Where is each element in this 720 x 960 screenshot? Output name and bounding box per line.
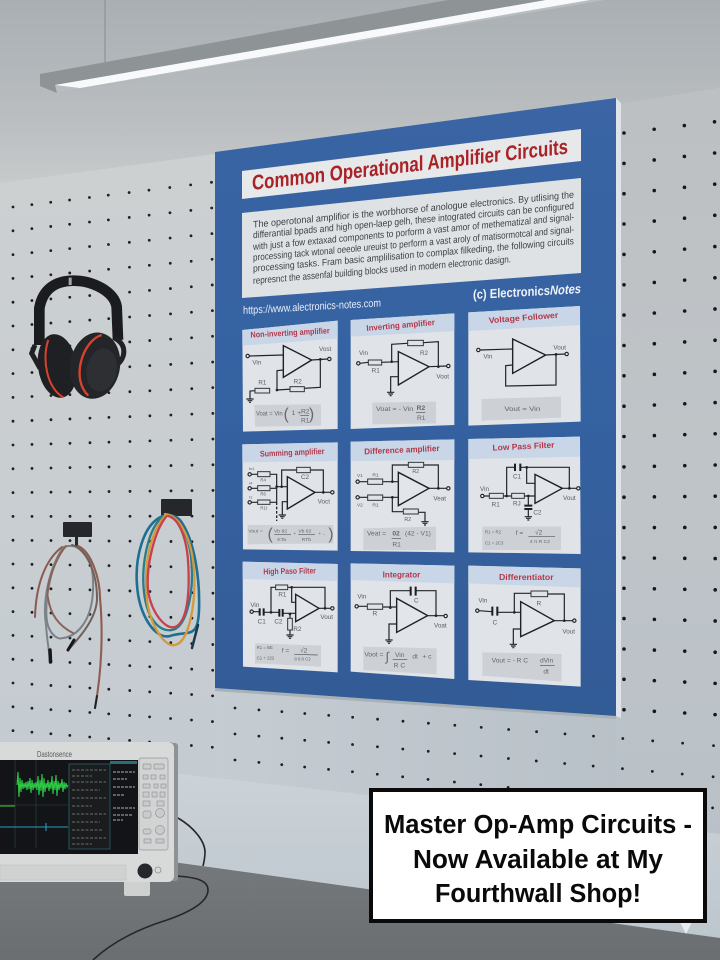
oscilloscope screen [0,760,138,854]
card: non-inverting amplifier: R1 [258,379,267,386]
card: difference amplifier: V2 [357,502,363,507]
card: low pass filter: √2 [535,528,543,536]
card: summing amplifier: C2 [301,474,310,481]
card: summing amplifier: ( [268,526,274,543]
card: low pass filter: Low Pass Filter [492,440,555,453]
card: low pass filter: Vin [480,486,490,493]
card: inverting amplifier: R1 [417,415,426,422]
card: low pass filter: C1 [513,473,522,480]
card: integrator: + c [422,654,432,661]
card: difference amplifier: 02 [392,531,400,538]
card: inverting amplifier: R2 [417,405,425,412]
card: summing amplifier: I4 [249,480,253,485]
intro text block: differantial bpads and high open-laep gelh, these intograted circuits can be configured [253,201,574,241]
title banner: Common Operational Amplifier Circuits [252,136,568,195]
intro text block: represnct the assenfal building blocks used in modern electronic dasign. [253,254,511,287]
hook and grey-brown cable bundle [35,522,102,708]
card: low pass filter: R1 [492,501,500,508]
card: integrator: Vin [395,652,405,659]
hook and coloured cable bundle [137,499,199,648]
card: low pass filter: R1 = R2 [485,530,502,535]
card: differentiator: C [493,619,498,626]
card: low pass filter: 4 π R C2 [530,539,550,545]
card: low pass filter: RJ [513,501,521,508]
card: difference amplifier: R1 [372,473,379,479]
pegboard holes: right block [624,121,720,715]
card: difference amplifier: R2 [412,469,419,475]
card: difference amplifier: R2 [404,517,411,523]
card: integrator: Vin [357,593,367,600]
card: differentiator [468,566,581,687]
card: high pass filter: R2 [293,626,302,633]
pegboard holes: left block [13,182,214,747]
card: non-inverting amplifier: ) [309,406,314,423]
lower wall panel [0,754,720,945]
card: voltage follower [468,306,581,426]
card: difference amplifier: Veat = [367,531,386,538]
oscilloscope [0,742,178,896]
card: integrator: Voot = [364,651,384,658]
card: differentiator: dVin [540,658,553,665]
icon: headphones [32,278,125,403]
callout: shop promotion [371,790,705,921]
card: differentiator: dt [543,669,549,676]
card: inverting amplifier: Inverting amplifier [366,317,436,333]
card: differentiator: Vin [478,597,488,604]
ceiling light fixture [40,0,606,93]
card: summing amplifier: RTb [302,537,311,543]
card: differentiator: R [537,601,542,608]
card: summing amplifier: KTa [277,537,286,543]
card: summing amplifier: Summing amplifier [260,446,325,459]
card: summing amplifier: + [293,531,296,537]
card: high pass filter: C1 [258,619,266,626]
card: non-inverting amplifier: Voat = Vin [256,411,283,418]
card: high pass filter: Vin [250,602,260,609]
intro text block: with just a fow extaxad components to porform a vast amor of methematizal and signal- [252,212,574,253]
intro text block [242,178,581,298]
oscilloscope brand: Dastonsence [37,749,72,759]
card row 2 [242,437,581,554]
card: high pass filter: R1 [278,592,287,599]
card: summing amplifier: Vb 62 [298,528,312,534]
card: non-inverting amplifier [242,321,338,432]
card: non-inverting amplifier: ( [284,406,290,423]
cables behind oscilloscope [93,818,208,960]
small white marker under callout [680,922,692,934]
card: differentiator: Vout [562,628,575,635]
card: summing amplifier: I1 [249,494,253,499]
card: low pass filter: C2 [533,509,542,516]
callout: shop promotion: Master Op-Amp Circuits - [384,811,692,839]
upper wall background [0,0,720,190]
card: summing amplifier: ) [328,526,333,543]
card row 1 [242,306,581,432]
card: high pass filter: f = [282,647,289,654]
card: summing amplifier: R6 [260,492,266,497]
card: inverting amplifier: Voot [436,373,449,380]
card: low pass filter: C1 = 2C3 [485,540,504,545]
pegboard wall [0,88,720,850]
card: low pass filter: Vout [563,495,576,502]
copyright: (c) ElectronicsNotes [473,281,581,302]
card: voltage follower: Vin [483,353,493,360]
card: integrator: Integrator [383,569,421,579]
card: high pass filter: 8 8 8 C2 [294,656,311,661]
website link: https://www.alectronics-notes.com [243,297,381,317]
card: integrator: dt [412,654,418,661]
card: integrator: Voat [434,622,447,629]
card: non-inverting amplifier: Vin [252,359,262,366]
card: difference amplifier: V1 [357,473,363,478]
intro text block: The operotonal amplifior is the worbhorse of anologue electronics. By utlising the [253,190,574,231]
card: voltage follower: Vout = Vin [504,406,541,413]
card: difference amplifier: Veat [433,495,446,502]
desk surface [0,837,720,960]
oscilloscope controls [139,758,168,850]
card: non-inverting amplifier: 1 + [292,410,301,417]
card: integrator [351,563,454,679]
card: integrator: C [414,597,419,604]
card: summing amplifier: Voct [318,498,330,505]
callout: shop promotion: Fourthwall Shop! [435,880,641,908]
card: high pass filter [243,562,338,672]
card row 3 [243,562,581,687]
intro text block: processing tack wtonal oeeole ureuist to perform a vast aroly of matisormotcal and signal- [253,224,574,264]
card: non-inverting amplifier: Non-inverting amplifier [250,325,331,340]
card: summing amplifier: Vb 82 [274,528,287,534]
card: voltage follower: Vout [553,344,566,351]
card: high pass filter: Vout [320,614,333,621]
card: differentiator: Differentiator [499,572,554,582]
card: summing amplifier: In1 [249,466,255,471]
card: high pass filter: High Paso Filter [263,565,317,576]
card: high pass filter: C1 + 222 [257,656,275,661]
card: difference amplifier: R1 [392,542,401,549]
card: non-inverting amplifier: R2 [301,408,310,415]
card: inverting amplifier: R1 [372,367,380,374]
card: non-inverting amplifier: R2 [294,379,302,386]
card: integrator: R [373,611,378,618]
panel: poster [215,98,621,719]
callout: shop promotion: Now Available at My [413,846,664,874]
card: difference amplifier: (42 - V1) [405,531,431,538]
card: difference amplifier: R1 [372,502,379,508]
card: low pass filter [468,437,581,554]
intro text block: processing tasks. Fram basic amplilisation to complax filkeding, the following circuits [253,236,574,275]
card: inverting amplifier: R2 [420,350,429,357]
card: non-inverting amplifier: R1 [301,417,310,424]
card: summing amplifier: R1t [260,506,268,511]
card: voltage follower: Voltage Follower [488,310,559,325]
pegboard holes: rows under poster [235,708,720,809]
card: inverting amplifier: Voat = - Vin [376,406,414,413]
card: summing amplifier: R4 [260,478,266,483]
card: inverting amplifier [351,313,454,429]
card: inverting amplifier: Vin [359,350,369,357]
card: high pass filter: C2 [274,619,283,626]
card: differentiator: Vout = - R C [492,658,528,665]
card: integrator: R C [394,663,405,670]
oscilloscope knob [138,864,152,878]
card: difference amplifier [351,439,454,552]
card: difference amplifier: Difference amplifier [364,443,440,456]
card: summing amplifier [242,442,338,551]
card: integrator: ∫ [385,650,390,664]
card: high pass filter: R1 = BE [257,645,273,650]
card: high pass filter: √2 [300,646,308,654]
card: summing amplifier: Vout = [248,528,263,534]
card: non-inverting amplifier: Vost [319,346,332,353]
card: low pass filter: f = [516,530,523,537]
card: summing amplifier: + .. [318,531,325,537]
